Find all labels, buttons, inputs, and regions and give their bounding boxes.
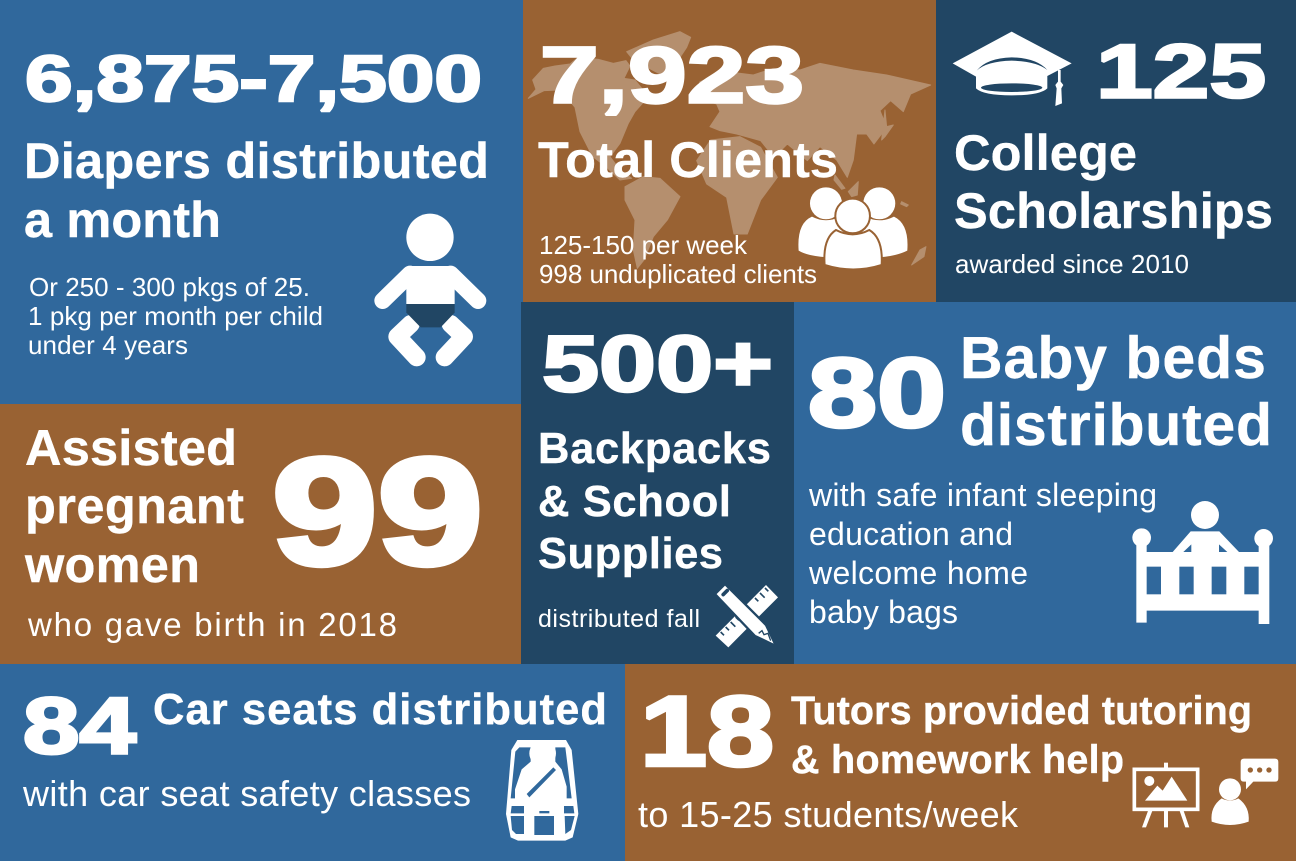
icon: ruler and pencil — [715, 584, 778, 647]
diapers details: 1 pkg per month per child — [28, 301, 323, 331]
panel: college scholarships — [936, 0, 1296, 302]
diapers heading line two: a month — [24, 191, 221, 248]
scholarships detail: awarded since 2010 — [955, 249, 1189, 279]
baby beds heading line two: distributed — [960, 392, 1272, 458]
panel: total clients — [523, 0, 936, 302]
pregnant women detail: who gave birth in 2018 — [27, 606, 397, 643]
panel: baby beds — [794, 302, 1296, 664]
diapers details — [28, 272, 323, 360]
icon: graduation cap — [953, 32, 1072, 106]
icon: child in car seat — [506, 740, 578, 841]
pregnant women heading: pregnant — [25, 477, 244, 534]
car seats detail: with car seat safety classes — [22, 773, 471, 814]
pregnant women heading: women — [24, 536, 200, 593]
icon: baby in crib — [1132, 501, 1273, 624]
panel: car seats — [0, 664, 625, 861]
backpacks heading: Supplies — [538, 530, 723, 578]
panel: pregnant women — [0, 404, 521, 664]
baby beds details: baby bags — [809, 594, 958, 630]
diapers figure: 6,875-7,500 — [25, 42, 482, 115]
panel: tutors — [625, 664, 1296, 861]
panel: diapers — [0, 0, 523, 404]
scholarships heading line two: Scholarships — [954, 182, 1273, 239]
icon: baby in diaper — [383, 214, 478, 357]
total clients details: 125-150 per week — [539, 230, 748, 260]
diapers details: under 4 years — [28, 330, 188, 360]
diapers details: Or 250 - 300 pkgs of 25. — [29, 272, 310, 302]
tutors heading line two: & homework help — [791, 738, 1124, 782]
pregnant women figure: 99 — [272, 427, 483, 597]
scholarships figure: 125 — [1096, 29, 1266, 114]
backpacks figure: 500+ — [542, 319, 773, 408]
backpacks heading — [538, 425, 771, 578]
pregnant women heading: Assisted — [25, 419, 237, 476]
icon: presentation board — [1134, 763, 1198, 827]
backpacks heading: & School — [538, 478, 731, 526]
diapers heading: Diapers distributed — [24, 132, 489, 189]
tutors detail: to 15-25 students/week — [638, 794, 1019, 835]
icon: speaking person — [1211, 759, 1278, 825]
car seats heading: Car seats distributed — [153, 686, 607, 734]
tutors figure: 18 — [640, 675, 774, 786]
backpacks heading: Backpacks — [538, 425, 771, 473]
pregnant women heading — [24, 419, 244, 593]
baby beds details — [808, 477, 1157, 630]
car seats figure: 84 — [23, 681, 137, 770]
total clients heading: Total Clients — [538, 131, 838, 188]
total clients details — [539, 230, 817, 289]
scholarships heading: College — [954, 124, 1137, 181]
tutors heading: Tutors provided tutoring — [791, 689, 1252, 733]
total clients figure: 7,923 — [540, 30, 804, 119]
baby beds details: education and — [809, 516, 1013, 552]
icon: group of people — [798, 187, 908, 269]
backpacks detail: distributed fall — [538, 605, 700, 633]
baby beds details: with safe infant sleeping — [808, 477, 1157, 513]
panel: backpacks — [521, 302, 794, 664]
baby beds details: welcome home — [808, 555, 1028, 591]
total clients details: 998 unduplicated clients — [539, 259, 817, 289]
baby beds heading: Baby beds — [960, 325, 1266, 391]
baby beds figure: 80 — [808, 337, 946, 447]
world map — [528, 32, 931, 268]
